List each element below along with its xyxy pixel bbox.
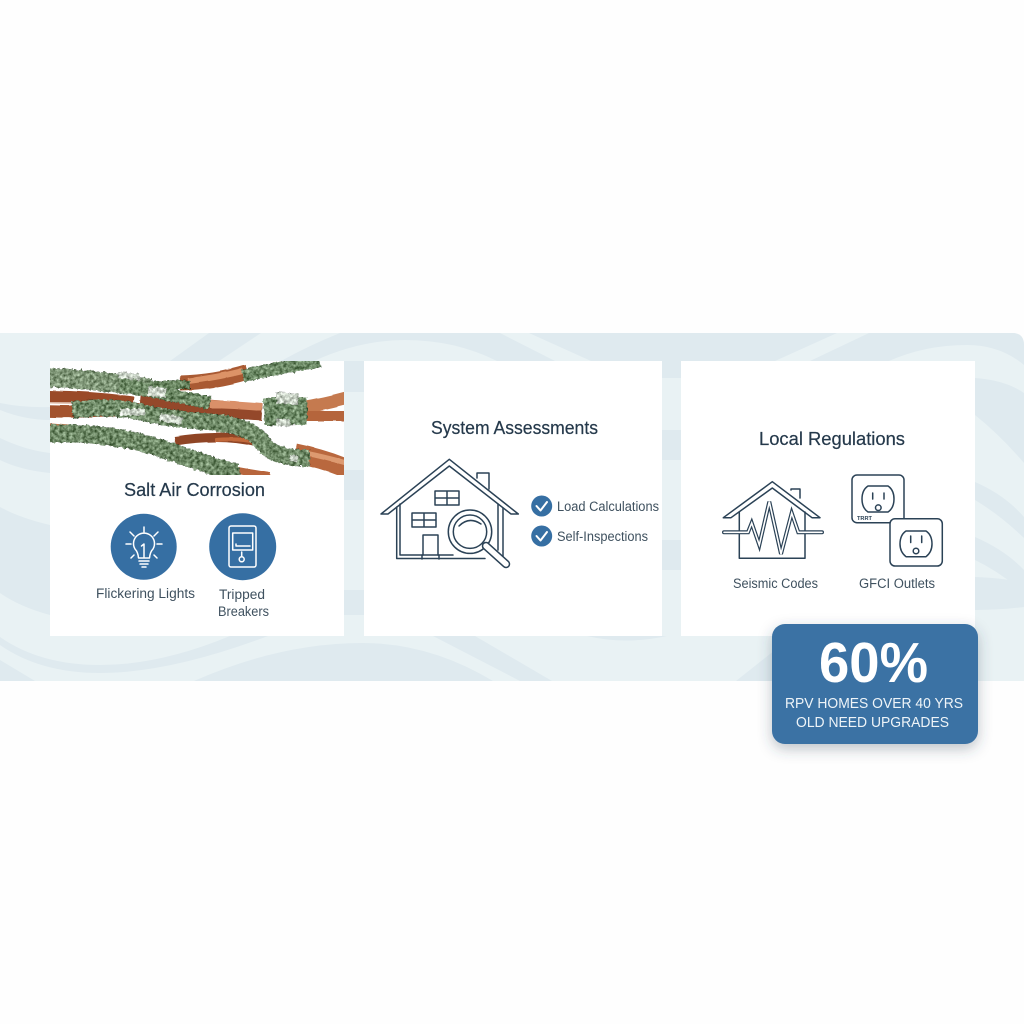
image: corroded copper wires <box>40 361 350 476</box>
heading: System Assessments <box>431 418 598 438</box>
label: tripped breakers: Breakers <box>218 604 269 619</box>
stat value: 60% <box>819 631 928 695</box>
label: flickering lights: Flickering Lights <box>96 586 195 601</box>
heading: Local Regulations <box>759 429 905 449</box>
panel: local regulations <box>681 361 975 636</box>
label: tripped breakers: Tripped <box>219 587 265 602</box>
icon: house with magnifying glass <box>381 459 518 564</box>
callout: 60% statistic <box>772 624 978 744</box>
stat description: OLD NEED UPGRADES <box>796 714 949 731</box>
icon: flickering light bulb <box>111 514 177 580</box>
panel: system assessments <box>364 361 662 636</box>
check: self-inspections: Self-Inspections <box>557 529 648 544</box>
checklist <box>531 496 659 546</box>
label: gfci outlets: GFCI Outlets <box>859 576 935 591</box>
background wave band <box>0 333 1024 681</box>
check: load calculations: Load Calculations <box>557 499 659 514</box>
stat description: RPV HOMES OVER 40 YRS <box>785 695 963 712</box>
icon: gfci outlets: TRRT <box>857 516 872 522</box>
label: tripped breakers <box>218 587 269 619</box>
icon: tripped breaker <box>209 513 276 580</box>
icon: gfci outlets <box>852 475 942 566</box>
heading: Salt Air Corrosion <box>124 480 265 500</box>
label: seismic codes: Seismic Codes <box>733 576 818 591</box>
infographic canvas <box>0 333 1024 758</box>
panel: salt air corrosion <box>40 361 350 636</box>
icon: house with seismic wave <box>723 482 822 558</box>
stat description <box>785 695 963 731</box>
